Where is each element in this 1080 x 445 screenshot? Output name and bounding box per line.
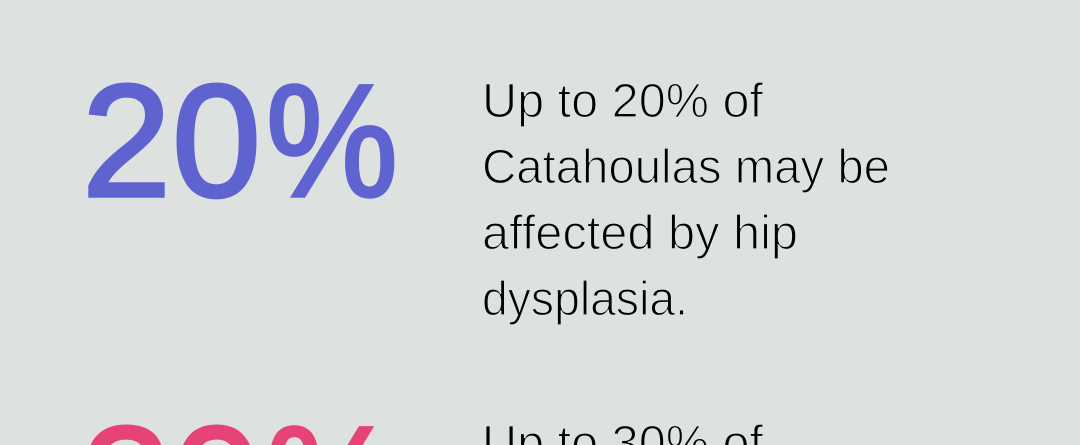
description: hip dysplasia: dysplasia.	[482, 273, 688, 326]
description: hip dysplasia	[482, 75, 890, 326]
statistic: 20%: 2	[82, 51, 171, 230]
statistic: 20%: %	[266, 51, 398, 230]
description: hip dysplasia: affected by hip	[482, 207, 798, 260]
statistic: 20%: 0	[172, 51, 261, 230]
description: hip dysplasia: Up to 20% of	[482, 75, 764, 128]
description: hip dysplasia: Catahoulas may be	[482, 141, 890, 194]
